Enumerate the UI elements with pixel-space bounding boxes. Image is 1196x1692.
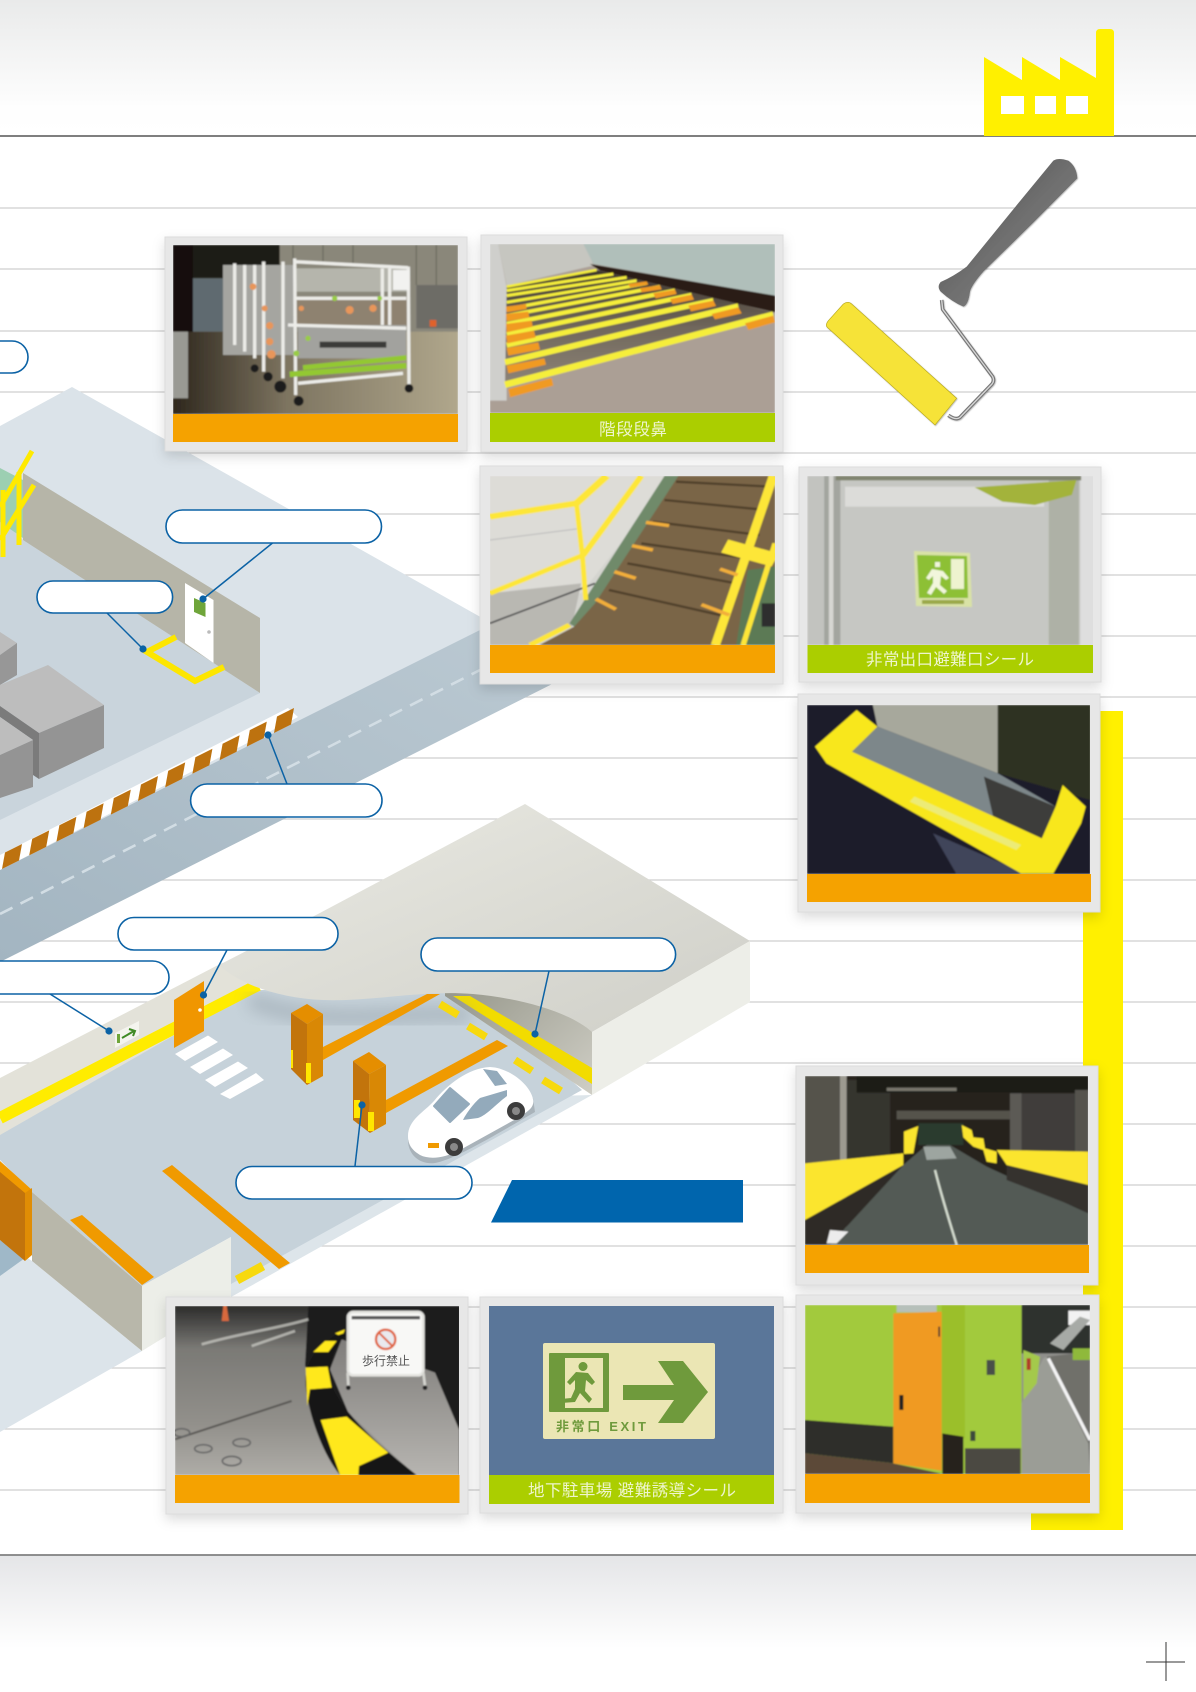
caption: emergency exit seal: 非常出口避難口シール (866, 650, 1034, 669)
grey boxes (0, 632, 104, 798)
crop mark (1146, 1642, 1185, 1681)
yellow vertical band (1031, 711, 1123, 1530)
lower block pale ground (0, 1240, 142, 1432)
callout pill: top-left (0, 341, 28, 373)
road surface (0, 625, 600, 962)
callout: pillar (236, 1101, 472, 1199)
photo card: stairs with yellow rails (480, 466, 783, 684)
callout: yellow wall band (421, 938, 676, 1038)
evacuation sign: 非常口 EXIT (556, 1419, 646, 1434)
orange parking lines (0, 994, 508, 1285)
hazard strip (0, 708, 298, 870)
orange door (174, 981, 204, 1048)
crosswalk (175, 1036, 264, 1099)
photo card: emergency exit seal (799, 467, 1101, 682)
exit sign on wall (115, 1021, 139, 1048)
back wall (23, 473, 260, 693)
icon: paint roller (826, 159, 1077, 425)
roof surface (219, 804, 750, 1032)
illustration: lower parking block (0, 804, 750, 1432)
photo card: tunnel with yellow wall band (796, 1066, 1098, 1285)
blue parallelogram heading block (491, 1180, 743, 1222)
inner right wall (445, 960, 592, 1095)
lower retaining wall (32, 1192, 142, 1351)
callout: orange door (118, 918, 338, 999)
stair opening with yellow rail (0, 451, 34, 557)
yellow wall line (0, 985, 258, 1118)
yellow L floor marking (147, 637, 224, 681)
road centre dashes (0, 670, 480, 914)
photo card: curb with pedestrian sign (166, 1297, 468, 1514)
callout: exit sign (0, 961, 169, 1035)
callout: floor L marking (37, 581, 173, 653)
caption: evacuation guidance seal: 地下駐車場 避難誘導シール (528, 1481, 736, 1500)
roof shadow (250, 1000, 470, 1017)
emergency door with sign (185, 583, 214, 663)
photo card: stair nosing (481, 235, 783, 452)
photo card: green wall with orange door (796, 1295, 1099, 1513)
illustration: upper building block (0, 387, 600, 962)
header gradient band (0, 0, 1196, 136)
pillar 2 (353, 1052, 386, 1133)
callout: emergency door (166, 510, 382, 603)
left pillar (0, 1172, 32, 1261)
corridor wall (0, 963, 262, 1135)
footer gradient band (0, 1555, 1196, 1665)
parking floor (0, 990, 582, 1286)
yellow band on inner wall (453, 996, 592, 1084)
wheel stops (237, 1004, 561, 1280)
caption: stair nosing: 階段段鼻 (599, 420, 667, 439)
pillar 1 (291, 1004, 323, 1085)
photo card: yellow L around door (798, 694, 1100, 912)
photo card: scaffold carts (165, 237, 467, 451)
icon: yellow factory (984, 29, 1114, 136)
evacuation sign (543, 1343, 715, 1439)
callout: hazard strip (191, 731, 382, 817)
photo card: evacuation guidance seal (480, 1297, 783, 1513)
white car (408, 1067, 535, 1163)
photo card: curb with pedestrian sign: 歩行禁止 (362, 1353, 410, 1368)
upper block top surface (0, 387, 500, 880)
roof side face (592, 941, 750, 1095)
recessed floor (0, 518, 260, 820)
